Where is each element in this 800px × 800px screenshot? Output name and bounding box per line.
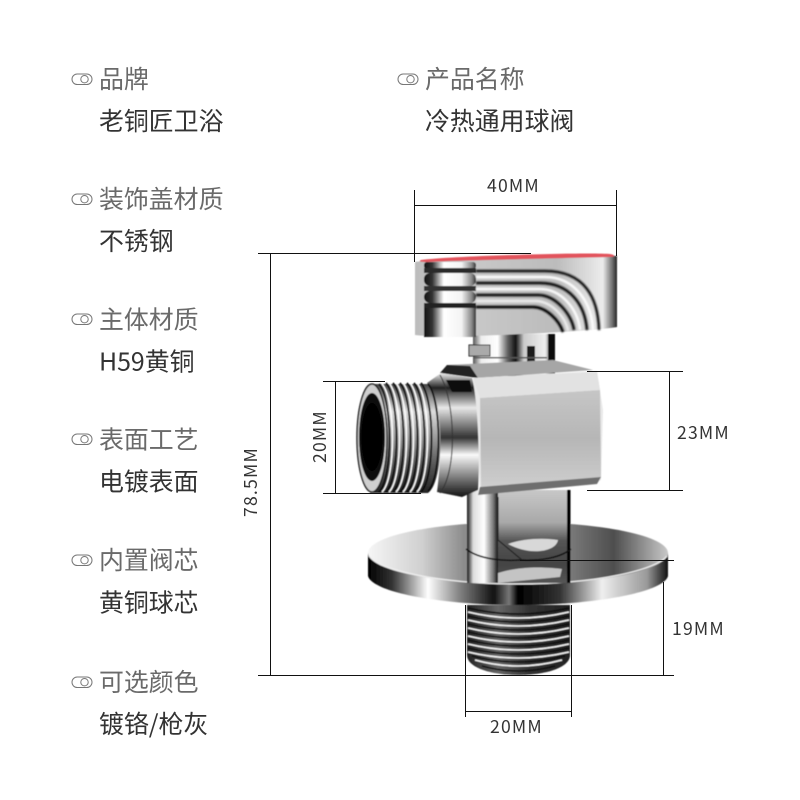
spec: colour options: 可选颜色 — [99, 663, 199, 699]
spec: product name: 冷热通用球阀 — [425, 102, 574, 138]
spec: valve core: 内置阀芯 — [99, 541, 199, 577]
dimension: 20MM port — [307, 381, 421, 494]
spec: product name: 产品名称 — [425, 60, 525, 96]
dimension: 23MM body: 23MM — [677, 420, 730, 445]
collar — [427, 373, 479, 497]
dimension: 40MM width: 40MM — [487, 173, 540, 198]
spec: body material: 主体材质 — [99, 300, 199, 336]
spec: body material — [72, 300, 199, 378]
spec: colour options: 镀铬/枪灰 — [99, 705, 208, 741]
dimension: 20MM bottom thread — [465, 605, 572, 739]
spec: surface finish — [72, 420, 199, 498]
lower stem — [466, 490, 571, 583]
flange — [368, 522, 668, 605]
dimension: 40MM width — [414, 173, 617, 262]
product: angle valve — [357, 253, 668, 675]
dimension: 20MM bottom thread: 20MM — [490, 714, 543, 739]
dimension: 78.5MM height — [238, 253, 674, 676]
spec: product name — [398, 60, 574, 138]
spec: surface finish: 表面工艺 — [99, 420, 199, 456]
spec: brand: 品牌 — [99, 60, 149, 96]
spec: valve core — [72, 541, 199, 620]
spec: cover material — [72, 180, 223, 258]
valve body hex — [440, 360, 603, 495]
dimension: 19MM thread: 19MM — [672, 616, 725, 641]
dimension: 78.5MM height: 78.5MM — [238, 447, 263, 517]
handle left bands — [424, 262, 476, 337]
dimension: 23MM body — [587, 371, 730, 490]
handle — [415, 253, 617, 337]
side thread port — [357, 383, 440, 493]
spec: surface finish: 电镀表面 — [99, 462, 199, 498]
spec: colour options — [72, 663, 208, 741]
lower thread — [467, 605, 570, 675]
spec: body material: H59黄铜 — [99, 342, 195, 378]
dimension: 19MM thread — [520, 560, 725, 675]
spec: valve core: 黄铜球芯 — [99, 584, 199, 620]
dimension: 20MM port: 20MM — [307, 410, 332, 463]
handle stem — [469, 334, 555, 376]
spec: cover material: 不锈钢 — [99, 222, 174, 258]
spec: brand: 老铜匠卫浴 — [99, 102, 224, 138]
spec: brand — [72, 60, 224, 138]
spec: cover material: 装饰盖材质 — [99, 180, 223, 216]
